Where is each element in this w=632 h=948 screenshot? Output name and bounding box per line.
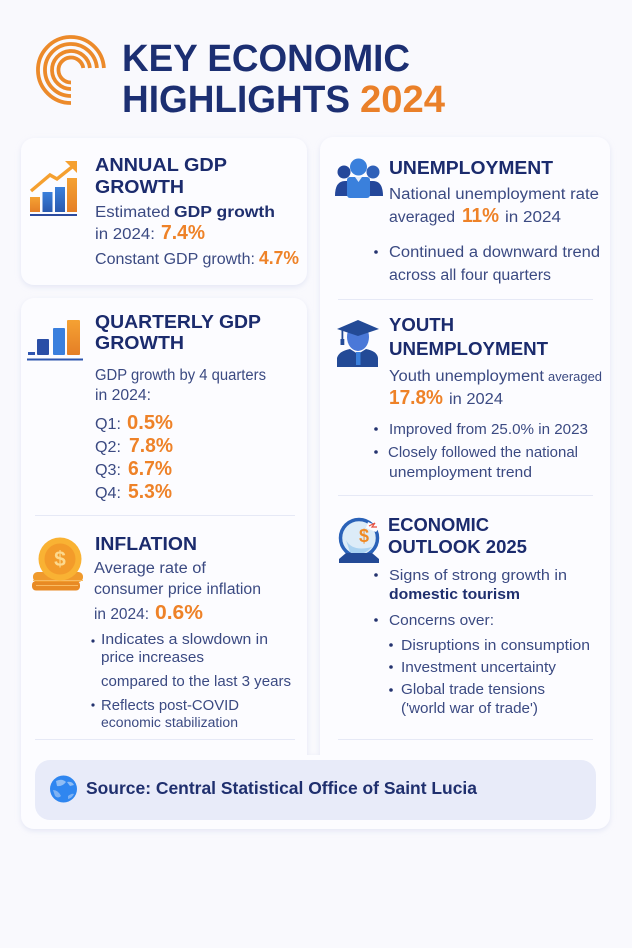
text: national rate: National unemployment rate: [389, 186, 599, 203]
list: quarterly values: Q3:: [95, 462, 121, 479]
text: average rate: consumer price inflation: [94, 581, 261, 598]
text: youth rate: in 2024: [449, 391, 503, 408]
text: estimated GDP growth: in 2024:: [95, 226, 155, 243]
panel: quarterly GDP growth: [27, 311, 266, 503]
text: average rate: in 2024:: [94, 606, 149, 623]
bullet: domestic tourism: [374, 568, 567, 603]
bullets: concerns: [374, 613, 590, 717]
list: quarterly values: 5.3%: [128, 481, 172, 503]
list: quarterly values: Q1:: [95, 416, 121, 433]
text: estimated GDP growth: Estimated: [95, 204, 170, 221]
text: national rate: in 2024: [505, 209, 561, 226]
heading: UNEMPLOYMENT: [389, 338, 549, 359]
text: constant GDP growth: Constant GDP growth:: [95, 251, 255, 268]
text: national rate: averaged: [389, 209, 455, 226]
title: KEY ECONOMIC: [122, 38, 410, 80]
bullets: concerns: Global trade tensions: [401, 682, 545, 698]
list: quarterly values: 6.7%: [128, 458, 172, 480]
text: intro: in 2024:: [95, 387, 151, 404]
icon: gold coins: [32, 538, 83, 590]
bullets: inflation notes: [91, 632, 291, 730]
bullets: concerns: ('world war of trade'): [401, 701, 538, 717]
heading: UNEMPLOYMENT: [389, 157, 554, 178]
icon: group of people: [335, 158, 383, 198]
panel: youth unemployment: [337, 314, 602, 481]
panel: source: [35, 760, 596, 820]
heading: YOUTH: [389, 314, 454, 335]
title: [122, 38, 445, 121]
bullets: inflation notes: Indicates a slowdown in: [101, 632, 268, 648]
heading: GROWTH: [95, 176, 184, 197]
bullets: inflation notes: price increases: [101, 650, 204, 666]
heading: [389, 314, 549, 359]
list: quarterly values: 0.5%: [127, 412, 173, 434]
text: youth rate: 17.8%: [389, 387, 443, 409]
icon: rising bar chart with arrow: [30, 161, 77, 216]
text: intro: [95, 367, 266, 404]
bullets: youth notes: Closely followed the national: [388, 445, 578, 461]
text: average rate: 0.6%: [155, 602, 203, 624]
panel: economic outlook 2025: [339, 514, 590, 717]
heading: QUARTERLY GDP: [95, 311, 261, 332]
heading: [95, 154, 227, 197]
text: national rate: [389, 186, 599, 227]
bullets: inflation notes: economic stabilization: [101, 715, 238, 730]
bullets: youth notes: unemployment trend: [389, 465, 532, 481]
text: constant GDP growth: [95, 248, 299, 268]
icon: graduate: [337, 320, 379, 367]
list: quarterly values: Q4:: [95, 485, 121, 502]
title: HIGHLIGHTS: [122, 79, 350, 121]
text: estimated GDP growth: [95, 204, 275, 244]
list: quarterly values: 7.8%: [129, 435, 173, 457]
text: youth rate: Youth unemployment: [389, 368, 545, 385]
bullets: concerns: Disruptions in consumption: [401, 638, 590, 654]
bullets: youth notes: [374, 422, 588, 481]
bullet: domestic tourism: domestic tourism: [389, 587, 520, 603]
text: constant GDP growth: 4.7%: [259, 248, 299, 268]
icon: crystal ball with dollar sign: [339, 520, 380, 563]
bullets: youth notes: Improved from 25.0% in 2023: [389, 422, 588, 438]
heading: OUTLOOK 2025: [388, 536, 527, 557]
text: youth rate: [389, 368, 602, 409]
list: quarterly values: [95, 412, 173, 503]
title: 2024: [360, 79, 445, 121]
bullet: downward trend: [374, 244, 600, 284]
icon: gold coins: $: [54, 548, 66, 571]
bullets: concerns: Investment uncertainty: [401, 660, 557, 676]
bullet: downward trend: Continued a downward trend: [389, 244, 600, 261]
heading: [95, 311, 261, 353]
panel: annual GDP growth: [21, 138, 307, 285]
bullets: inflation notes: compared to the last 3 years: [101, 674, 291, 690]
panel: unemployment: [335, 157, 600, 284]
bullets: concerns: Concerns over:: [389, 613, 494, 629]
list: quarterly values: Q2:: [95, 439, 121, 456]
source text: Source: Central Statistical Office of Saint Lucia: [86, 778, 477, 798]
text: intro: GDP growth by 4 quarters: [95, 367, 266, 384]
bullet: domestic tourism: Signs of strong growth in: [389, 568, 567, 584]
heading: ANNUAL GDP: [95, 154, 227, 175]
text: average rate: [94, 560, 261, 624]
heading: INFLATION: [95, 533, 197, 554]
text: average rate: Average rate of: [94, 560, 207, 577]
heading: GROWTH: [95, 332, 184, 353]
bullet: downward trend: across all four quarters: [389, 267, 551, 284]
text: estimated GDP growth: GDP growth: [174, 204, 275, 221]
heading: ECONOMIC: [388, 514, 489, 535]
bullets: inflation notes: Reflects post-COVID: [101, 698, 239, 714]
icon: quarterly bars: [27, 320, 83, 360]
main card background: [21, 137, 610, 829]
icon: orange concentric arcs logo: [38, 37, 104, 103]
text: national rate: 11%: [462, 205, 499, 227]
text: estimated GDP growth: 7.4%: [161, 222, 205, 244]
icon: crystal ball with dollar sign: $: [359, 526, 369, 546]
icon: globe: [50, 776, 77, 802]
text: youth rate: averaged: [548, 369, 602, 384]
panel: inflation: [32, 533, 291, 730]
heading: [388, 514, 527, 557]
